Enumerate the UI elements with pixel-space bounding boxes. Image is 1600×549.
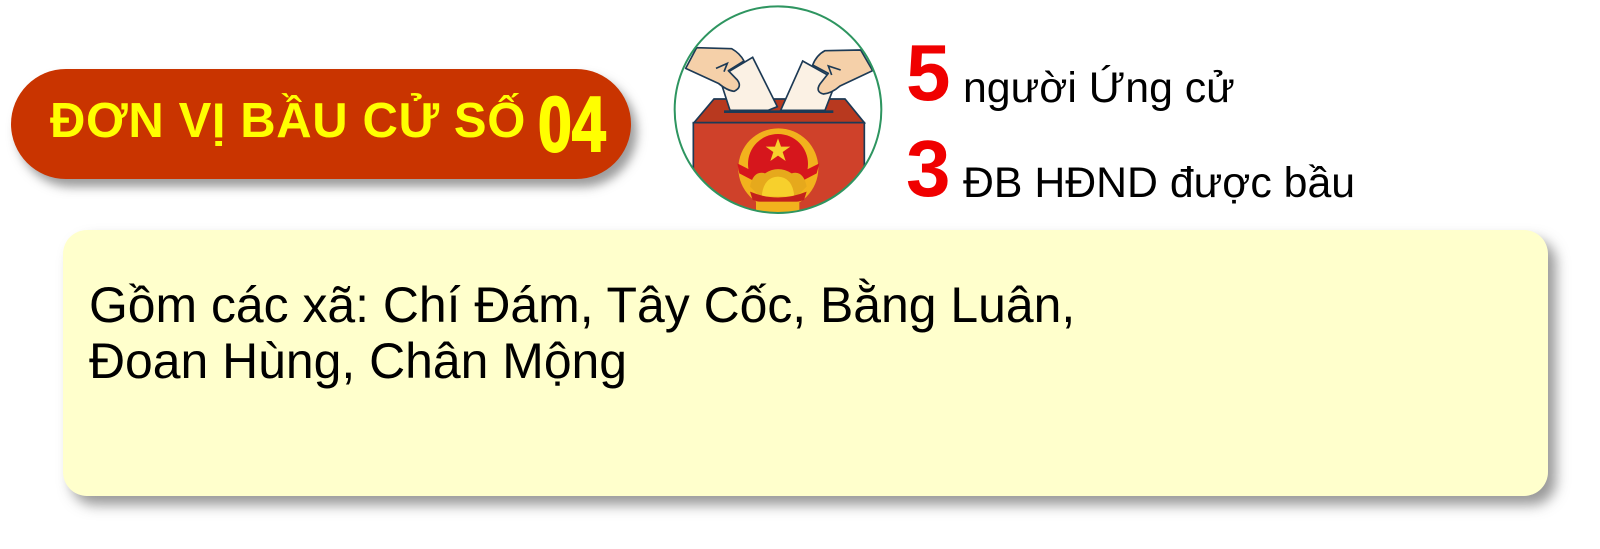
- commune text: [89, 277, 1075, 389]
- right hand: [813, 50, 873, 94]
- number 3: 3: [906, 124, 950, 213]
- stat: 3 delegates: [906, 124, 1355, 213]
- panel: commune list: [63, 230, 1548, 496]
- stat: 5 candidates: [906, 28, 1235, 117]
- national emblem: [737, 128, 819, 215]
- icon: ballot box in circle: [674, 5, 882, 214]
- ballot box top: [694, 99, 864, 123]
- title text: ĐƠN VỊ BẦU CỬ SỐ: [50, 94, 526, 148]
- commune text: Đoan Hùng, Chân Mộng: [89, 333, 627, 389]
- ballot slot: [724, 110, 833, 113]
- right ballot: [781, 61, 837, 110]
- title pill: Đơn vị bầu cử số 04: [11, 69, 631, 179]
- label: người Ứng cử: [963, 64, 1235, 112]
- left hand: [686, 48, 744, 91]
- left ballot: [719, 57, 777, 110]
- ballot box front: [692, 122, 866, 210]
- circle outline: [675, 6, 881, 213]
- label: ĐB HĐND được bầu: [963, 159, 1355, 207]
- number 5: 5: [906, 28, 950, 117]
- number 04: 04: [538, 80, 606, 168]
- commune text: Gồm các xã: Chí Đám, Tây Cốc, Bằng Luân,: [89, 277, 1075, 333]
